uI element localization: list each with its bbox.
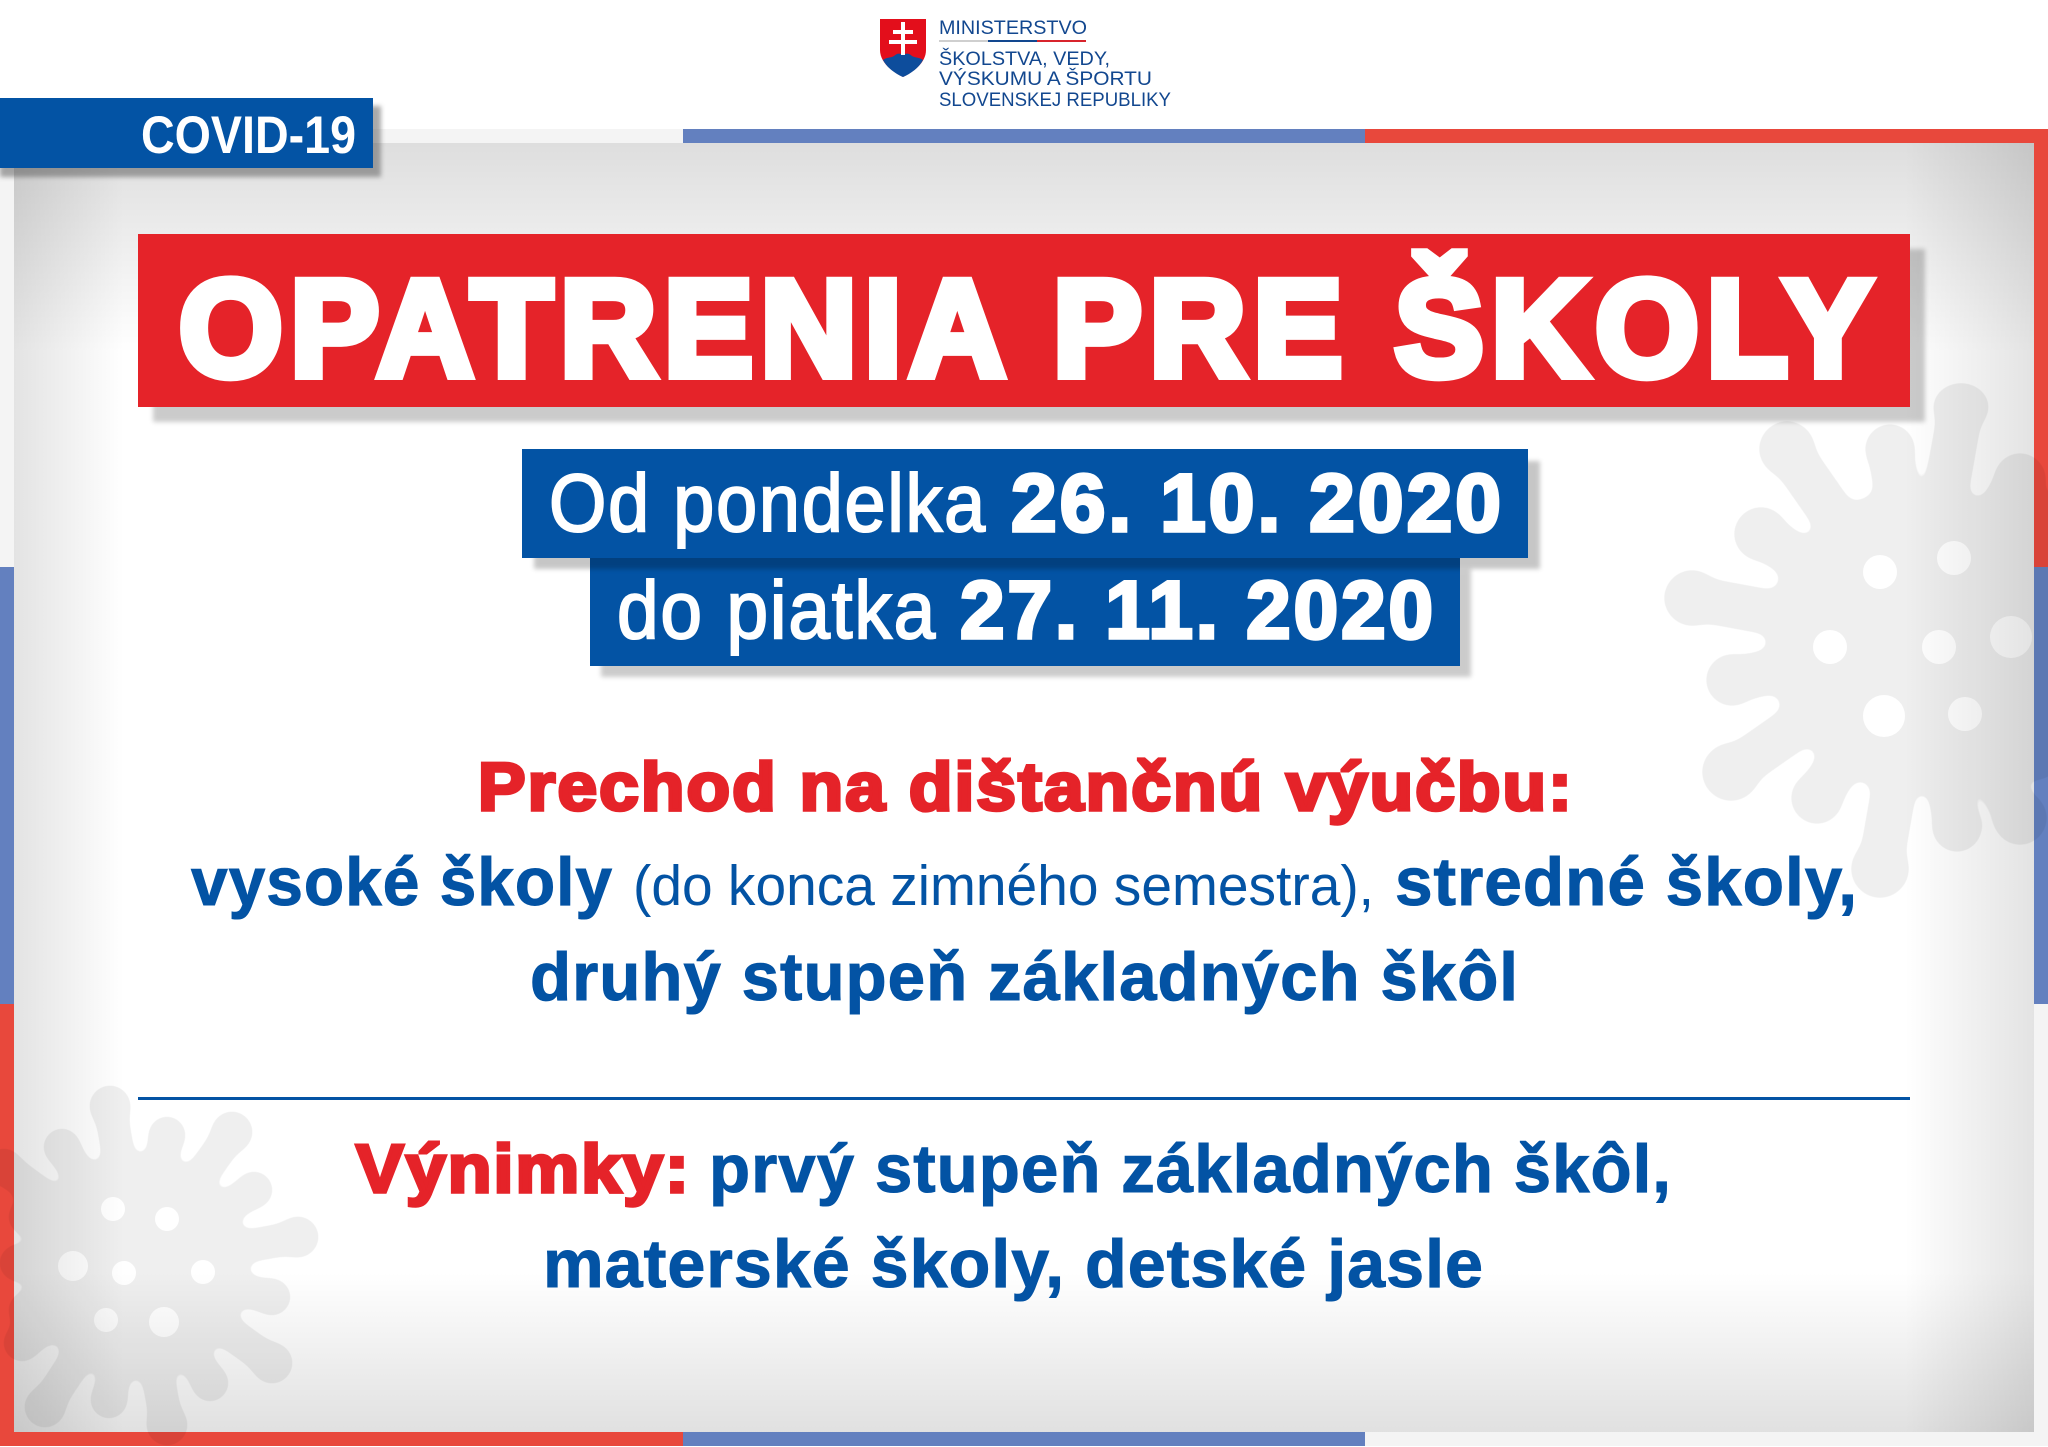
heading: distance learning: Prechod na dištančnú výučbu: xyxy=(478,749,1574,825)
text block: exceptions: Výnimky: xyxy=(356,1131,691,1207)
date line 2: 27. 11. 2020 xyxy=(960,565,1436,656)
logo wordmark: ŠKOLSTVA, VEDY, xyxy=(939,48,1110,70)
logo wordmark: MINISTERSTVO xyxy=(939,18,1087,39)
text block: affected schools xyxy=(191,844,1858,1015)
date line 1 xyxy=(522,449,1540,569)
text block: exceptions xyxy=(356,1131,1672,1302)
tag: COVID-19: COVID-19 xyxy=(141,106,356,165)
logo wordmark xyxy=(939,18,1171,111)
logo wordmark: VÝSKUMU A ŠPORTU xyxy=(939,68,1152,90)
logo wordmark: SLOVENSKEJ REPUBLIKY xyxy=(939,90,1171,111)
date line 2 xyxy=(590,558,1471,677)
text block: affected schools: vysoké školy xyxy=(191,844,613,920)
text block: affected schools: stredné školy, xyxy=(1395,844,1858,920)
divider xyxy=(138,1097,1910,1100)
text block: exceptions: prvý stupeň základných škôl, xyxy=(709,1131,1672,1207)
title banner: OPATRENIA PRE ŠKOLY xyxy=(179,252,1880,406)
date line 1: 26. 10. 2020 xyxy=(1011,458,1504,549)
text block: affected schools: druhý stupeň základných škôl xyxy=(530,939,1519,1015)
icon: Slovak coat of arms xyxy=(880,19,926,77)
date banner xyxy=(522,449,1540,677)
tag: COVID-19 xyxy=(0,98,381,177)
text block: affected schools: (do konca zimného semestra), xyxy=(633,854,1374,918)
date line 1: Od pondelka xyxy=(549,458,987,549)
icon: virus watermark left xyxy=(0,1085,319,1446)
icon: virus watermark right xyxy=(1664,383,2048,898)
logo: ministry of education xyxy=(880,18,1171,111)
date line 2: do piatka xyxy=(617,565,937,656)
text block: exceptions: materské školy, detské jasle xyxy=(543,1226,1484,1302)
